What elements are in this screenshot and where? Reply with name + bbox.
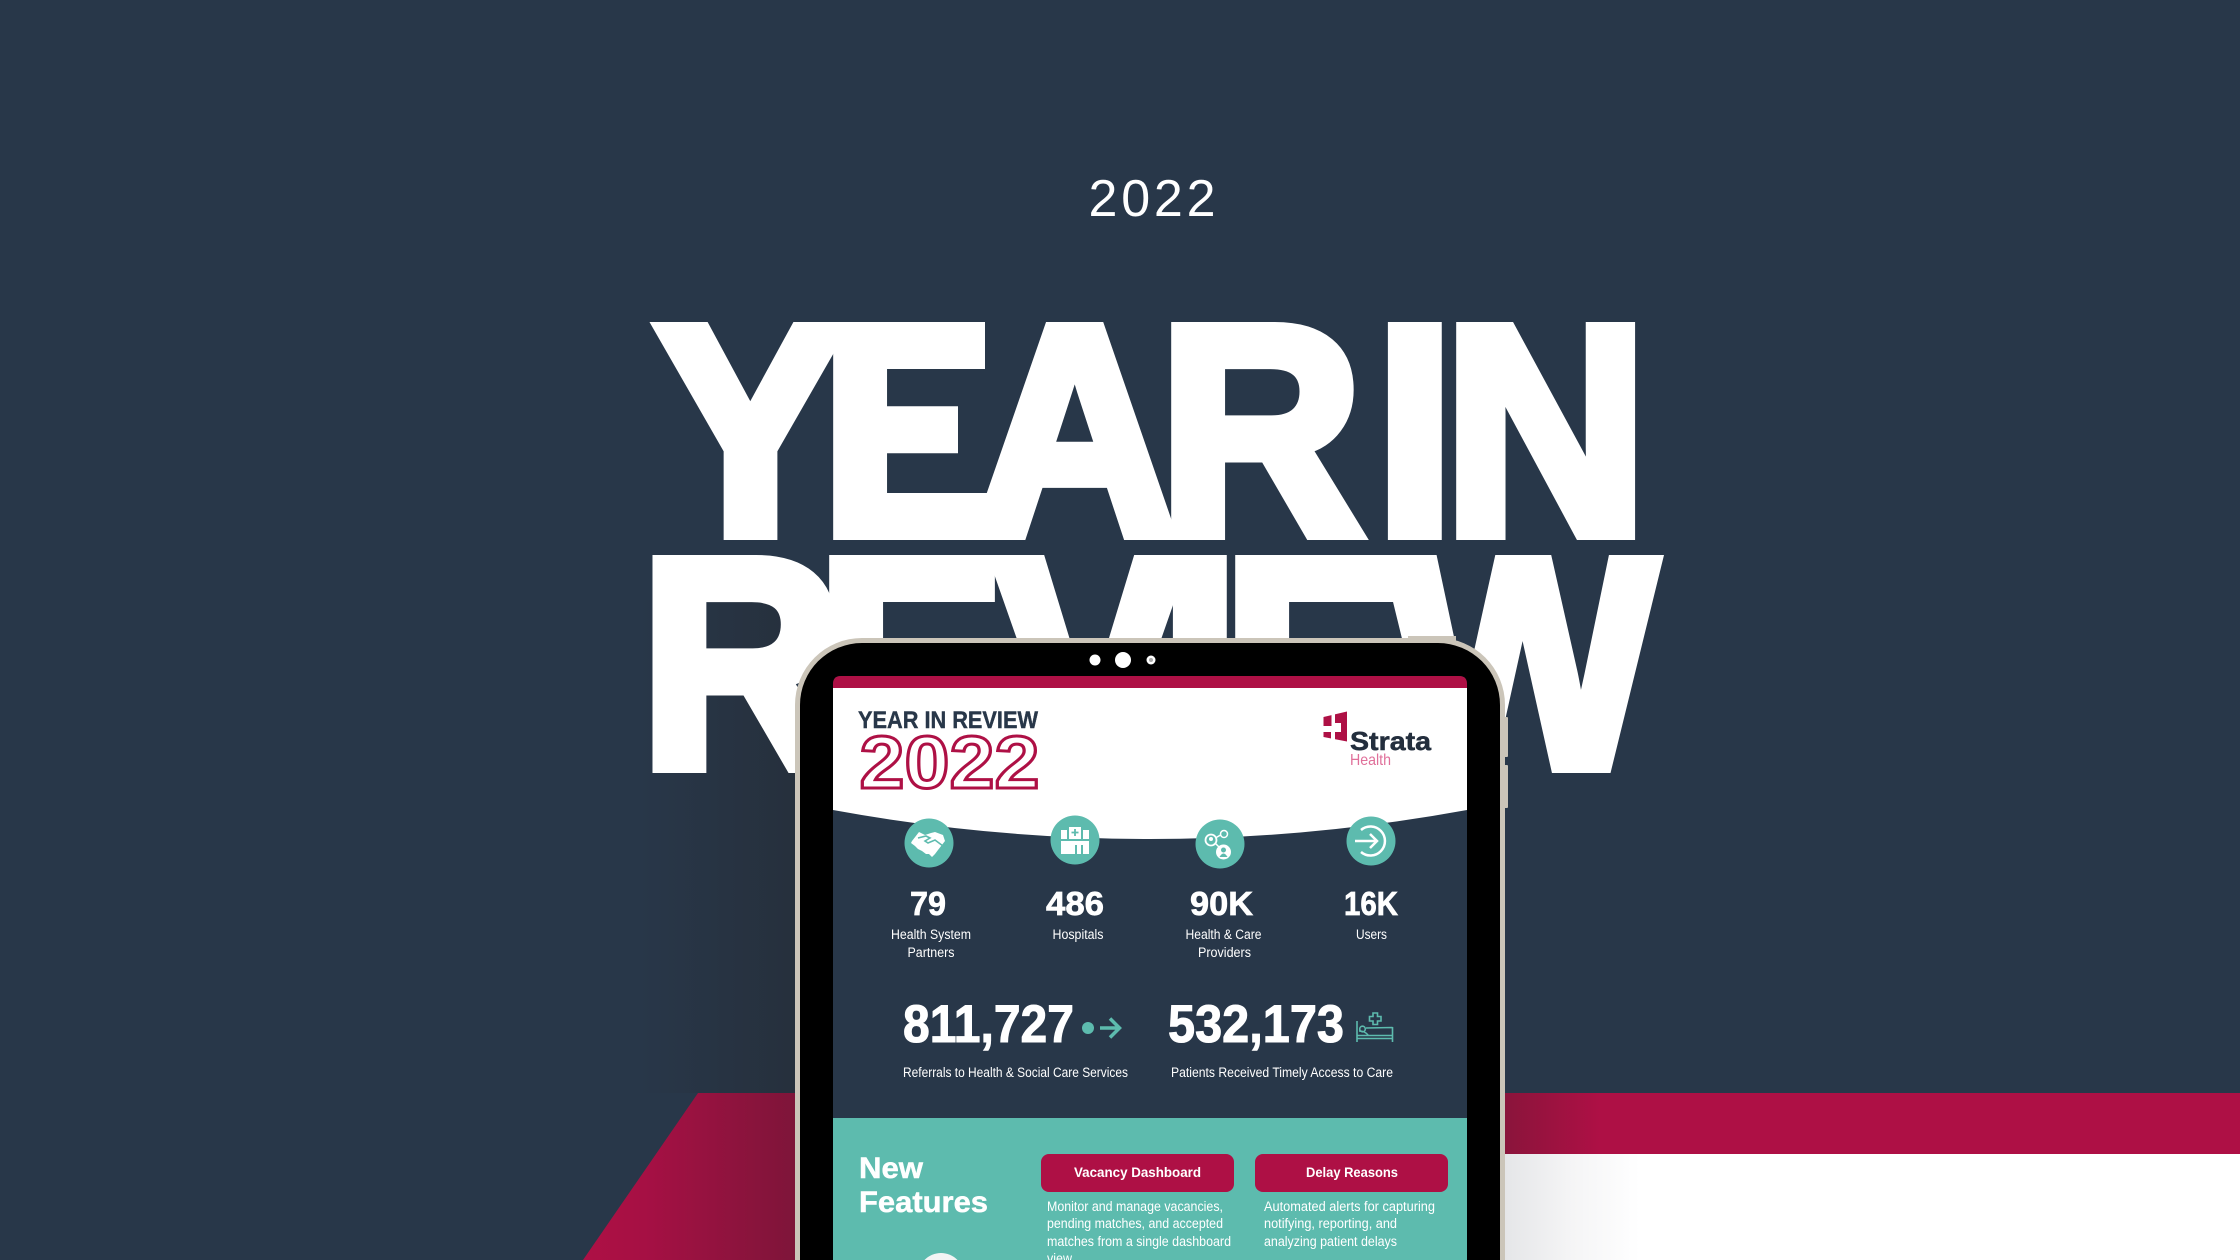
description: notifying, reporting, and [1264,1216,1397,1231]
stat labels: Providers [1198,945,1251,960]
icon: hospital [1050,816,1100,864]
tablet frame [795,638,1505,1260]
new features heading: New [859,1152,924,1185]
white base right [1500,1154,2240,1260]
tablet buttons [1408,636,1508,808]
outlined year: 2022 [860,721,1040,804]
description [1264,1199,1435,1249]
stat labels: Hospitals [1052,927,1104,942]
stat numbers [911,891,1398,916]
headline: YEAR IN REVIEW [640,265,1658,830]
tablet bezel [800,643,1500,1260]
screen [833,676,1467,1260]
description [1047,1199,1231,1260]
description: Automated alerts for capturing [1264,1199,1435,1214]
white circle graphic [924,1253,958,1260]
logo health: Health [1350,752,1391,769]
logo cross [1324,712,1347,742]
tablet [795,636,1508,1260]
screen header white [833,688,1467,839]
button [1041,1154,1234,1192]
headline: YEAR IN REVIEW: YEAR IN [656,265,1647,597]
description: analyzing patient delays [1264,1234,1397,1249]
feature: delay reasons [1255,1154,1448,1249]
crimson band right [1500,1093,2240,1154]
tablet shadow [640,600,795,1093]
logo strata: Strata [1350,726,1432,756]
button [1255,1154,1448,1192]
patients label: Patients Received Timely Access to Care [1171,1065,1393,1080]
icon: sign in arrow [1346,816,1396,866]
teal panel [833,1118,1467,1260]
patients figure: 532,173 [1168,995,1344,1054]
description: pending matches, and accepted [1047,1216,1223,1231]
description: matches from a single dashboard [1047,1234,1231,1249]
feature: vacancy dashboard [1041,1154,1234,1260]
button label: Delay Reasons [1306,1164,1398,1180]
button label: Vacancy Dashboard [1074,1164,1201,1180]
referrals label: Referrals to Health & Social Care Services [903,1065,1128,1080]
crimson band left [583,1093,800,1260]
description: Monitor and manage vacancies, [1047,1199,1223,1214]
referrals figure: 811,727 [903,995,1074,1054]
stat labels: Partners [908,945,955,960]
stat labels [892,929,1386,957]
screen navy panel [833,676,1467,1118]
screen title: YEAR IN REVIEW [858,707,1038,734]
new features heading [860,1157,987,1212]
year label: 2022 [1088,170,1216,228]
stat numbers: 79 [910,885,946,922]
icon: network of people [1196,820,1244,868]
stat labels: Users [1356,927,1387,942]
stat labels: Health & Care [1186,927,1262,942]
icon: handshake [904,818,954,868]
stat numbers: 486 [1046,885,1104,922]
icon: hospital bed [1357,1013,1392,1042]
logo [1322,711,1432,769]
icon: arrow [1082,1018,1120,1038]
crimson top bar [833,676,1467,688]
headline: YEAR IN REVIEW: REVIEW [640,498,1658,830]
stat numbers: 90K [1190,885,1253,922]
stat labels: Health System [891,927,971,942]
camera dots [1090,652,1156,668]
new features heading: Features [859,1186,988,1219]
stat numbers: 16K [1344,885,1398,922]
